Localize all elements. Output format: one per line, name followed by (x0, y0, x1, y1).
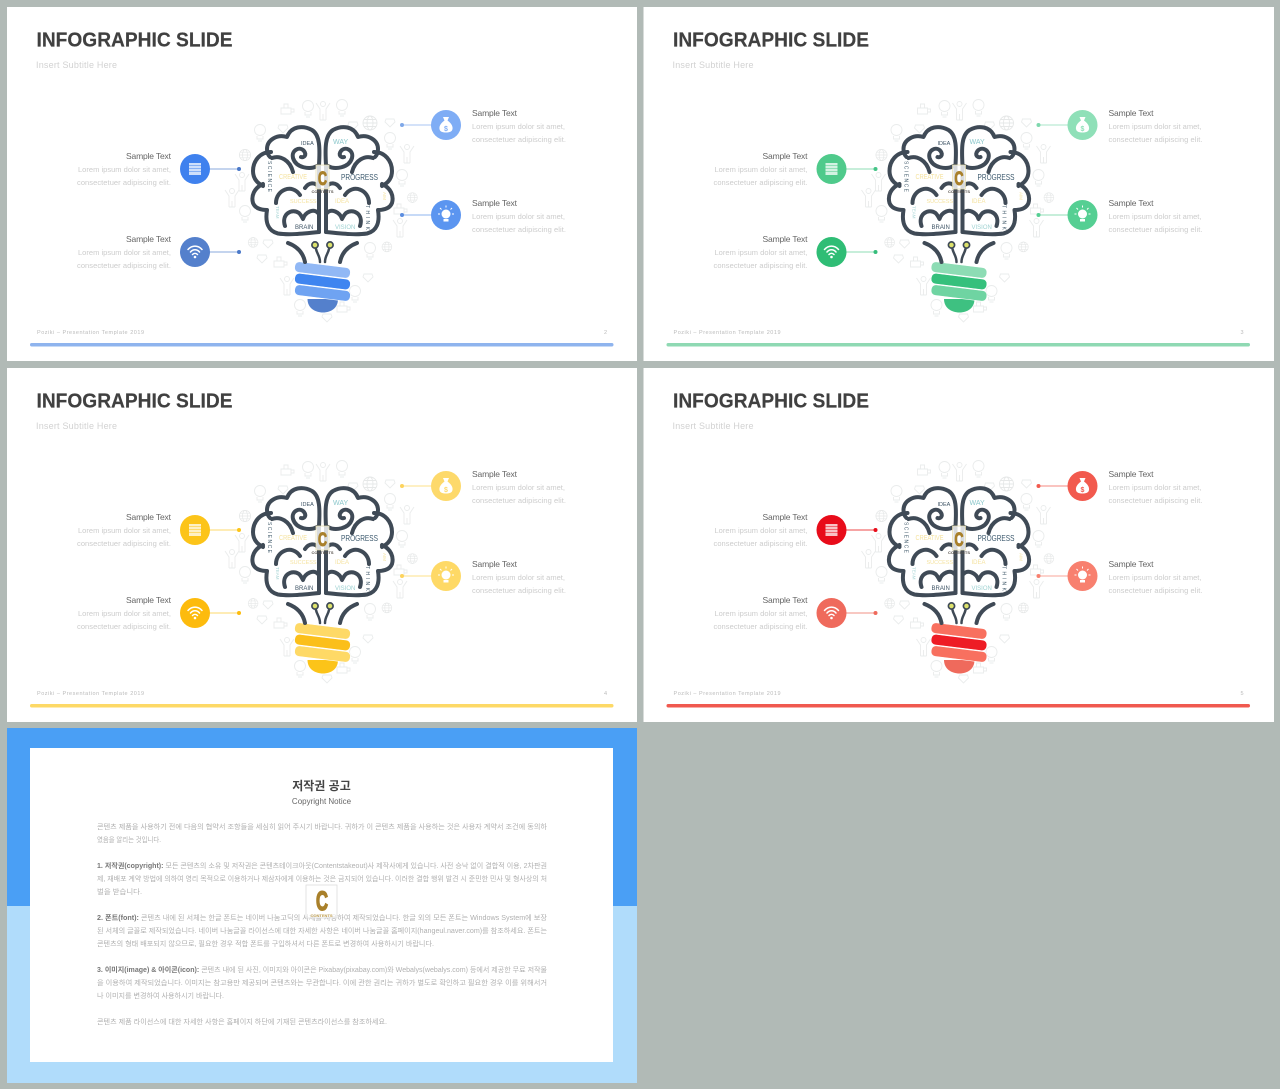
panel: blue slide (7, 7, 637, 361)
brain illustration: THINK (364, 566, 370, 592)
title: INFOGRAPHIC SLIDE (36, 390, 232, 412)
brain illustration: TEAM (912, 567, 916, 580)
brain illustration (252, 488, 393, 623)
callout: top left (77, 151, 241, 187)
callout: bottom right: Sample Text (1108, 559, 1154, 569)
callout: top left: consectetuer adipiscing elit. (77, 178, 171, 187)
callout: bottom right (400, 559, 566, 595)
brain illustration: CONTENTS (312, 550, 334, 555)
callout: top right: consectetuer adipiscing elit. (1108, 496, 1202, 505)
brain illustration: CREATIVE (279, 535, 307, 542)
brain illustration: VISION (972, 586, 992, 592)
faint icon cloud (225, 100, 417, 322)
background upper band (7, 728, 637, 906)
callout: bottom right: Lorem ipsum dolor sit amet, (472, 573, 565, 582)
section 1: copyright: 제, 재배포 계약 방법에 의하여 영리 목적으로 이용하거나 제삼자에게 이용하는 것은 금지되어 있습니다. 이러한 결합 행위 발견 시 준민한 민사 및 형사상의 처 (97, 874, 547, 883)
callout: bottom right: Lorem ipsum dolor sit amet, (1108, 573, 1202, 582)
bottom accent bar (666, 343, 1250, 346)
title: INFOGRAPHIC SLIDE (673, 28, 869, 52)
callout: bottom right: consectetuer adipiscing elit. (472, 225, 566, 234)
callout: bottom right: Lorem ipsum dolor sit amet, (472, 212, 565, 221)
brain illustration: CONTENTS (312, 189, 334, 194)
brain illustration: CONTENTS (948, 189, 970, 194)
callout: top right: $ (444, 487, 448, 494)
callout: bottom right: Sample Text (472, 559, 518, 569)
brain illustration: IDEA (938, 502, 951, 508)
callout: bottom left: consectetuer adipiscing elit. (77, 261, 171, 270)
brain illustration: CREATIVE (279, 174, 307, 181)
brain illustration: BRAIN (295, 225, 313, 231)
panel: yellow slide (7, 368, 637, 722)
intro paragraph: 였음을 알리는 것입니다. (97, 835, 161, 844)
brain illustration: AIM (1018, 553, 1024, 561)
callout: top right: Lorem ipsum dolor sit amet, (1108, 483, 1202, 492)
brain illustration: C (318, 530, 327, 551)
callout: bottom left (77, 595, 241, 631)
brain illustration: TEAM (275, 206, 280, 219)
callout: bottom left (714, 595, 878, 631)
faint icon cloud (225, 460, 417, 683)
brain illustration: IDEA (938, 141, 951, 147)
slide background (644, 368, 1274, 722)
brain illustration: WAY (333, 139, 348, 146)
brain illustration: SCIENCE (902, 522, 908, 554)
page number: 2 (604, 330, 607, 336)
callout: top right (1036, 108, 1202, 144)
brain illustration: SUCCESS (926, 199, 953, 205)
brain illustration: AIM (382, 192, 387, 200)
title: INFOGRAPHIC SLIDE (36, 28, 232, 52)
brain illustration: THINK (1000, 566, 1006, 592)
notice subtitle: Copyright Notice (292, 797, 352, 806)
brain illustration: PROGRESS (341, 533, 378, 543)
slide background (644, 7, 1274, 361)
callout: top left (77, 512, 241, 548)
section 3: image and icon: 3. 이미지(image) & 아이콘(icon): 콘텐츠 내에 된 사진, 이미지와 아이콘은 Pixabay(pixabay.com)와 Webalys(webalys.com) 등에서 제공한 무료 저작물 (97, 965, 548, 974)
callout: bottom left: consectetuer adipiscing elit. (714, 261, 808, 270)
page number: 5 (1240, 691, 1244, 697)
brain illustration: IDEA (972, 199, 986, 205)
brain illustration (889, 127, 1029, 262)
callout: bottom left: Lorem ipsum dolor sit amet, (714, 609, 808, 618)
callout: top right: $ (1081, 126, 1085, 133)
brain illustration: IDEA (301, 141, 314, 147)
brain illustration: VISION (335, 225, 355, 231)
bottom accent bar (30, 343, 614, 346)
callout: top left: Sample Text (762, 151, 808, 161)
brain illustration: C (954, 169, 964, 190)
panel: green slide (644, 7, 1274, 361)
callout: bottom left: Sample Text (126, 595, 172, 605)
brain illustration: TEAM (275, 567, 280, 580)
callout: bottom right (1036, 198, 1202, 234)
brain illustration: THINK (1000, 205, 1006, 231)
brain illustration: AIM (382, 553, 387, 561)
callout: bottom right (400, 198, 566, 234)
brain illustration: TEAM (912, 206, 916, 219)
callout: top right: Sample Text (1108, 108, 1154, 118)
subtitle: Insert Subtitle Here (672, 60, 754, 70)
brain illustration: SUCCESS (926, 560, 953, 566)
callout: top left: consectetuer adipiscing elit. (714, 178, 808, 187)
footer text: Poziki – Presentation Template 2019 (37, 330, 144, 336)
callout: bottom left: consectetuer adipiscing elit. (77, 622, 171, 631)
callout: bottom left: Sample Text (762, 595, 808, 605)
callout: top left: Lorem ipsum dolor sit amet, (78, 526, 171, 535)
brain illustration: THINK (364, 205, 370, 231)
callout: bottom left: Sample Text (126, 234, 172, 244)
brain illustration: CREATIVE (916, 535, 944, 542)
callout: top left (714, 151, 878, 187)
brain illustration: C (954, 530, 964, 551)
slide background (7, 368, 637, 722)
subtitle: Insert Subtitle Here (36, 60, 117, 70)
callout: bottom right: consectetuer adipiscing elit. (1108, 586, 1202, 595)
brain illustration: PROGRESS (978, 533, 1015, 543)
brain illustration: IDEA (335, 199, 349, 205)
callout: top right: Sample Text (472, 108, 518, 118)
callout: bottom left: Sample Text (762, 234, 808, 244)
callout: bottom left (77, 234, 241, 270)
section 2: font: 2. 폰트(font): 콘텐츠 내에 된 서체는 한글 폰트는 네이버 나눔고딕의 서체를 사용하여 제작되었습니다. 한글 외의 모든 폰트는 Windows System에 보장 (97, 913, 548, 922)
watermark logo: C (316, 886, 328, 916)
closing line: 콘텐츠 제품 라이선스에 대한 자세한 사항은 홈페이지 하단에 기재된 콘텐츠라이선스를 참조하세요. (97, 1017, 387, 1026)
callout: top right: consectetuer adipiscing elit. (472, 135, 566, 144)
brain illustration: WAY (333, 500, 348, 507)
brain illustration: CREATIVE (916, 174, 944, 181)
callout: bottom right: consectetuer adipiscing elit. (472, 586, 566, 595)
bulb base (931, 622, 987, 674)
brain illustration: CONTENTS (948, 550, 970, 555)
callout: top left: Sample Text (762, 512, 808, 522)
brain illustration: SCIENCE (266, 522, 272, 554)
brain illustration: SUCCESS (290, 560, 317, 566)
faint icon cloud (862, 460, 1054, 683)
callout: bottom left: Lorem ipsum dolor sit amet, (78, 609, 171, 618)
brain illustration (252, 127, 393, 262)
page number: 3 (1240, 330, 1244, 336)
brain illustration: SCIENCE (902, 161, 908, 193)
bottom accent bar (30, 704, 614, 708)
brain illustration: BRAIN (932, 225, 950, 231)
callout: top left: Sample Text (126, 151, 172, 161)
notice title: 저작권 공고 (292, 778, 351, 793)
page number: 4 (604, 691, 607, 697)
bulb base (294, 261, 351, 312)
brain illustration: C (318, 169, 327, 190)
subtitle: Insert Subtitle Here (672, 421, 754, 431)
callout: top left (714, 512, 878, 548)
footer text: Poziki – Presentation Template 2019 (674, 691, 780, 697)
callout: top right: Lorem ipsum dolor sit amet, (1108, 122, 1202, 131)
watermark logo: CONTENTS (310, 913, 333, 918)
intro paragraph (97, 822, 548, 844)
footer text: Poziki – Presentation Template 2019 (37, 691, 144, 697)
footer text: Poziki – Presentation Template 2019 (674, 330, 780, 336)
brain illustration: IDEA (335, 560, 349, 566)
brain illustration: IDEA (972, 560, 986, 566)
callout: bottom left: Lorem ipsum dolor sit amet, (714, 248, 808, 257)
brain illustration: BRAIN (295, 586, 313, 592)
section 3: image and icon: 나 이미지를 변경하여 사용하시기 바랍니다. (97, 991, 224, 1000)
callout: bottom left (714, 234, 878, 270)
callout: bottom right: Lorem ipsum dolor sit amet, (1108, 212, 1202, 221)
brain illustration: AIM (1018, 192, 1024, 200)
section 2: font (97, 913, 548, 948)
brain illustration (889, 488, 1029, 623)
brain illustration: VISION (972, 225, 992, 231)
callout: bottom left: consectetuer adipiscing elit. (714, 622, 808, 631)
bulb base (931, 261, 987, 312)
section 1: copyright: 벌을 받습니다. (97, 887, 142, 896)
brain illustration: PROGRESS (978, 172, 1015, 182)
brain illustration: SCIENCE (266, 161, 272, 193)
callout: top left: consectetuer adipiscing elit. (714, 539, 808, 548)
callout: bottom right: Sample Text (1108, 198, 1154, 208)
brain illustration: WAY (970, 500, 985, 507)
callout: bottom right: Sample Text (472, 198, 518, 208)
callout: top right (1036, 469, 1202, 505)
watermark logo (306, 885, 337, 918)
callout: top left: Lorem ipsum dolor sit amet, (78, 165, 171, 174)
panel: red slide (644, 368, 1274, 722)
panel: copyright notice (7, 728, 637, 1083)
callout: top left: consectetuer adipiscing elit. (77, 539, 171, 548)
brain illustration: WAY (970, 139, 985, 146)
bulb base (294, 622, 351, 674)
callout: bottom right (1036, 559, 1202, 595)
brain illustration: BRAIN (932, 586, 950, 592)
callout: top left: Lorem ipsum dolor sit amet, (714, 526, 808, 535)
background lower band (7, 906, 637, 1083)
callout: top right: Sample Text (1108, 469, 1154, 479)
faint icon cloud (862, 100, 1054, 322)
callout: top left: Lorem ipsum dolor sit amet, (714, 165, 808, 174)
callout: bottom right: consectetuer adipiscing elit. (1108, 225, 1202, 234)
callout: top right (400, 469, 566, 505)
notice sheet (30, 748, 613, 1062)
section 2: font: 콘텐츠의 형태 배포되지 않으므로, 필요한 경우 적합 폰트를 구입하셔서 다른 폰트로 변경하여 사용하시기 바랍니다. (97, 939, 434, 948)
callout: top right: Sample Text (472, 469, 518, 479)
callout: top left: Sample Text (126, 512, 172, 522)
section 3: image and icon (97, 965, 548, 1000)
callout: top right: Lorem ipsum dolor sit amet, (472, 483, 565, 492)
callout: top right (400, 108, 566, 144)
brain illustration: SUCCESS (290, 199, 317, 205)
callout: top right: consectetuer adipiscing elit. (1108, 135, 1202, 144)
section 1: copyright: 1. 저작권(copyright): 모든 콘텐츠의 소유 및 저작권은 콘텐츠테이크아웃(Contentstakeout)사 제작사에게 있습니다. 사전 승낙 없이 결합적 이용, 2차판권 (97, 861, 547, 870)
section 1: copyright (97, 861, 547, 896)
brain illustration: VISION (335, 586, 355, 592)
callout: top right: consectetuer adipiscing elit. (472, 496, 566, 505)
title: INFOGRAPHIC SLIDE (673, 390, 869, 412)
brain illustration: IDEA (301, 502, 314, 508)
section 2: font: 된 서체의 글꼴로 제작되었습니다. 네이버 나눔글꼴 라이선스에 대한 자세한 사항은 네이버 나눔글꼴 홈페이지(hangeul.naver.com)를 참조하세요. 폰트는 (97, 926, 548, 935)
section 3: image and icon: 을 이용하여 제작되었습니다. 이미지는 참고용만 제공되며 콘텐츠와는 무관합니다. 이에 관한 권리는 귀하가 별도로 확인하고 필요한 경우 이를 위해서거 (97, 978, 547, 987)
callout: bottom left: Lorem ipsum dolor sit amet, (78, 248, 171, 257)
callout: top right: $ (1081, 487, 1085, 494)
intro paragraph: 콘텐츠 제품을 사용하기 전에 다음의 협약서 조항들을 세심히 읽어 주시기 바랍니다. 귀하가 이 콘텐츠 제품을 사용하는 것은 사용자 계약서 조건에 동의하 (97, 822, 548, 831)
slide background (7, 7, 637, 361)
bottom accent bar (666, 704, 1250, 708)
callout: top right: Lorem ipsum dolor sit amet, (472, 122, 565, 131)
callout: top right: $ (444, 126, 448, 133)
subtitle: Insert Subtitle Here (36, 421, 117, 431)
brain illustration: PROGRESS (341, 172, 378, 182)
